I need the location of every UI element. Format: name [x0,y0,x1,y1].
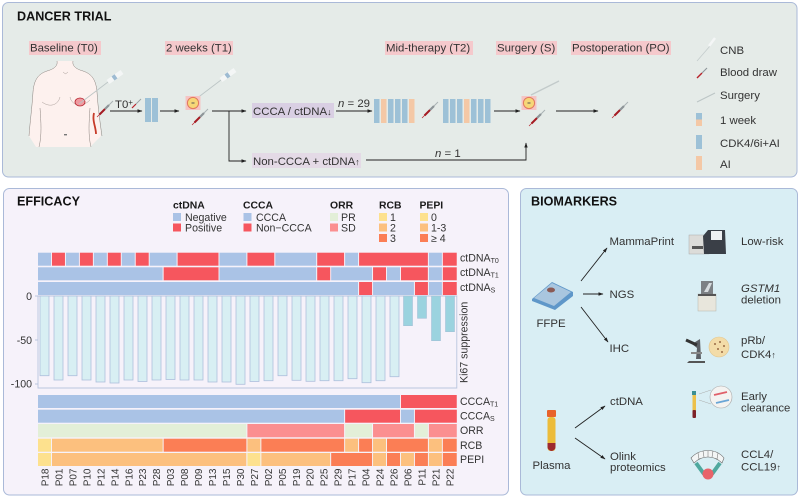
patient labels: P15 [222,468,233,486]
timepoint labels: Surgery (S) [497,42,555,54]
legend: PEPI: PEPI [420,200,443,212]
patient labels: P16 [124,468,135,486]
label: Olink proteomics: proteomics [610,462,666,474]
row labels: lower heatmap: PEPI [460,454,484,466]
icon: T1 biopsy [186,70,235,110]
box: CCCA / ctDNA down: CCCA / ctDNA↓ [253,106,332,118]
patient labels: P17 [348,468,359,486]
legend: trial: Surgery [720,90,760,102]
label: CCL4/CCL19 up [741,449,781,474]
timepoint labels: Baseline (T0) [30,42,98,54]
row labels: lower heatmap: CCCA [460,410,490,422]
patient labels: P02 [264,468,275,486]
bars: therapy weeks before T2 [374,99,414,123]
label: NGS: NGS [610,289,635,301]
label: GSTM1 deletion: deletion [741,294,781,306]
legend: PEPI: 0 [431,212,437,224]
heading: efficacy: EFFICACY [17,194,81,208]
legend: CCCA [243,200,313,234]
row labels: lower heatmap [460,396,498,466]
heatmap: PEPI [38,453,457,466]
arrow: T0 to treatment: + [128,98,133,107]
patient labels: P22 [445,468,456,486]
panel: DANCER trial [2,2,797,177]
icon: surgery blood draw [529,110,545,126]
label: CCL4/CCL19 up: CCL19↑ [741,462,781,474]
legend: trial [696,38,780,171]
patient labels: P23 [138,468,149,486]
heatmap: RCB [38,439,457,452]
axis: Ki67 suppression: Ki67 suppression [458,302,470,383]
legend: RCB: 2 [390,222,396,234]
label: ctDNA: ctDNA [610,396,643,408]
arrow: n = 29: n = 29 [338,98,370,110]
arrow: plasma to ctDNA [575,406,605,428]
patient labels: P28 [152,468,163,486]
arrow [494,110,520,112]
label: CCL4/CCL19 up: CCL4/ [741,449,774,461]
patient labels: P05 [278,468,289,486]
patient labels: P08 [180,468,191,486]
axis: Ki67 suppression: -50 [17,335,32,347]
row labels: ctDNA [460,252,499,294]
row labels: lower heatmap: RCB [460,440,482,452]
heatmap: CCCA T1 [38,395,457,408]
legend: trial: 1 week [720,115,756,127]
row labels: lower heatmap: T1 [490,402,498,408]
row labels: lower heatmap: S [490,416,495,423]
patient labels: P07 [68,468,79,486]
legend: RCB [379,200,402,245]
heatmap: ctDNA T1 [38,267,457,280]
row labels: ctDNA: S [491,288,496,294]
box: Non-CCCA + ctDNA up: Non-CCCA + ctDNA↑ [253,156,360,168]
heading: biomarkers: BIOMARKERS [531,194,617,208]
patient labels [40,468,456,486]
label: early clearance: clearance [741,402,790,414]
panel: efficacy [4,188,508,495]
patient labels: P06 [404,468,414,486]
legend: PEPI: ≥ 4 [431,233,446,245]
legend: CCCA: CCCA [243,200,274,212]
row labels: ctDNA: T0 [491,258,499,265]
icon: FFPE block [532,282,573,310]
heatmap: ctDNA T0 [38,253,457,266]
arrow: n = 1 [366,143,526,160]
legend: RCB: 1 [390,212,396,224]
icon: torso with biopsy [29,61,122,147]
icon: microscope and stained tissue [686,337,729,363]
label: Olink proteomics [610,451,666,474]
axis: Ki67 suppression [11,291,470,390]
patient labels: P29 [334,468,345,486]
legend: ctDNA: ctDNA [173,200,205,212]
legend: trial: CDK4/6i+AI [720,138,780,150]
legend: RCB: RCB [379,200,402,212]
arrow: T0 to treatment: T0 [115,99,128,111]
timepoint labels: 2 weeks (T1) [166,42,232,54]
patient labels: P14 [110,468,121,486]
panel: biomarkers [520,188,798,495]
legend: ORR: SD [341,222,356,234]
patient labels: P27 [250,468,261,486]
label: GSTM1 deletion: GSTM1 [741,283,780,295]
arrow [160,110,179,112]
arrow: plasma to Olink [575,438,605,459]
row labels: ctDNA: ctDNA [460,282,491,294]
row labels: ctDNA: ctDNA [460,252,491,264]
row labels: ctDNA: T1 [491,272,499,280]
label: pRb/CDK4 up: pRb/ [741,335,766,347]
patient labels: P18 [40,468,52,486]
label: pRb/CDK4 up: CDK4↑ [741,349,776,361]
patient labels: P21 [431,468,442,486]
icon: T1 blood draw [192,109,208,125]
legend: trial: Blood draw [720,67,778,79]
icon: postoperation blood draw [612,102,628,118]
patient labels: P09 [194,468,205,486]
icon: sequencer [698,281,716,311]
label: pRb/CDK4 up [741,335,776,361]
heading: DANCER trial: DANCER TRIAL [17,10,112,24]
arrow: branch [212,110,246,112]
label: early clearance [741,391,790,414]
legend: ORR: ORR [330,200,354,212]
patient labels: P04 [362,468,373,486]
legend: ORR: PR [341,212,356,224]
label: plasma: Plasma [533,460,571,472]
bars: therapy weeks after T2 [443,99,490,123]
icon: Olink proximity probes [691,450,724,480]
patient labels: P24 [376,468,386,486]
patient labels: P01 [54,468,66,486]
patient labels: P25 [320,468,331,486]
icon: plasma tube [547,410,556,451]
row labels: lower heatmap: ORR [460,425,484,437]
legend: trial: CNB [720,45,744,57]
arrow: FFPE to NGS [583,293,603,295]
heatmap: ORR [38,424,457,437]
arrow: FFPE to MammaPrint [581,248,607,281]
legend: PEPI: 1-3 [431,222,446,234]
legend: CCCA: Non−CCCA [256,222,313,234]
row labels: lower heatmap: CCCA [460,396,490,408]
label: Low-risk: Low-risk [741,236,784,248]
legend: RCB: 3 [390,233,396,245]
icon: ctDNA tube and strands [692,386,732,418]
icon: T2 blood draw [422,102,438,118]
patient labels: P12 [96,468,107,486]
axis: Ki67 suppression: -100 [11,378,32,390]
patient labels: P26 [390,468,400,486]
icon: microarray scanner [689,230,726,254]
legend: PEPI [420,200,446,245]
bars: first treatment weeks [145,98,158,122]
arrow: T0 to treatment [110,98,142,111]
label: MammaPrint: MammaPrint [610,236,675,248]
label: early clearance: Early [741,391,767,403]
timepoint labels: Postoperation (PO) [572,42,670,54]
timepoint labels [29,41,671,55]
timepoint labels: Mid-therapy (T2) [386,42,470,54]
patient labels: P10 [82,468,93,486]
heatmap: CCCA S [38,410,457,423]
patient labels: P13 [208,468,219,486]
label: FFPE: FFPE [536,318,566,330]
legend: ctDNA: Positive [185,222,222,234]
legend: ctDNA: Negative [185,212,227,224]
patient labels: P30 [236,468,247,486]
label: GSTM1 deletion [741,283,781,306]
row labels: ctDNA: ctDNA [460,267,491,279]
legend: ORR [330,200,356,234]
label: Olink proteomics: Olink [610,451,636,463]
heatmap: ctDNA S [38,282,457,295]
legend: trial: AI [720,159,731,171]
arrow: FFPE to IHC [581,307,608,342]
arrow: n = 1: n = 1 [435,148,461,160]
arrow [556,110,598,112]
patient labels: P20 [306,468,317,486]
label: IHC: IHC [610,343,629,355]
patient labels: P03 [166,468,177,486]
patient labels: P19 [292,468,303,486]
legend: ctDNA [173,200,227,234]
arrow: branch to non-CCCA [229,111,246,161]
bar chart: Ki67 suppression [40,296,454,384]
patient labels: P11 [417,468,428,486]
axis: Ki67 suppression: 0 [26,291,32,303]
legend: CCCA: CCCA [256,212,287,224]
icon: surgery tumour [522,81,559,110]
